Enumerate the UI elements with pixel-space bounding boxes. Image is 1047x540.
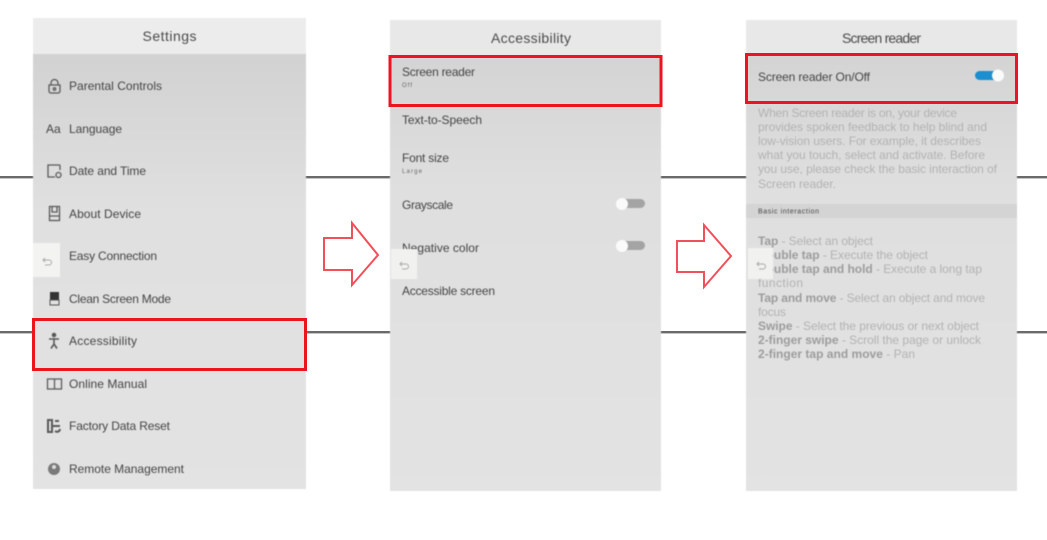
interaction list: 2-finger tap and move - Pan: [758, 347, 915, 361]
back button: [391, 249, 417, 279]
arrow: step 1 to 2: [324, 223, 378, 285]
menu item: Grayscale: Grayscale: [402, 198, 453, 212]
menu item: Clean Screen Mode: Clean Screen Mode: [69, 292, 171, 306]
interaction list: Double tap - Execute the object: [758, 248, 929, 262]
menu item: Negative color: Negative color: [402, 241, 479, 255]
menu item: Text-to-Speech: Text-to-Speech: [402, 113, 482, 127]
menu item: Accessibility: Accessibility: [69, 334, 137, 348]
icon: remote management: [48, 463, 60, 475]
highlight box: Screen reader On/Off: [746, 54, 1016, 102]
description paragraph: provides spoken feedback to help blind and: [758, 120, 987, 134]
heading: Settings: Settings: [142, 28, 196, 44]
icon: accessibility person: [49, 334, 59, 348]
menu item: Parental Controls: Parental Controls: [69, 79, 162, 93]
interaction list: Tap and move - Select an object and move: [758, 291, 985, 305]
back button: [748, 248, 773, 279]
panel background: Settings: [33, 54, 306, 489]
menu item: Date and Time: Date and Time: [69, 164, 146, 178]
icon: parental controls lock: [49, 80, 60, 93]
icon: online manual: [48, 379, 62, 389]
header bar: Accessibility: [390, 20, 661, 56]
menu item: Font size: [402, 151, 449, 175]
menu item: Easy Connection: Easy Connection: [69, 249, 157, 263]
header bar: Screen reader: [746, 20, 1017, 55]
menu item: Screen reader: Off: [402, 83, 412, 89]
description paragraph: what you touch, select and activate. Before: [757, 148, 985, 162]
menu item: Screen reader: [402, 65, 475, 89]
icon: factory data reset: [48, 420, 60, 432]
interaction list: Tap - Select an object: [758, 234, 874, 248]
arrow: step 2 to 3: [677, 225, 731, 287]
description paragraph: When Screen reader is on, your device: [758, 106, 957, 120]
back button: [33, 243, 60, 277]
menu item: About Device: About Device: [69, 207, 141, 221]
menu item: Font size: Font size: [402, 151, 449, 165]
menu item: Accessible screen: Accessible screen: [402, 284, 495, 298]
menu item: Factory Data Reset: Factory Data Reset: [69, 419, 171, 433]
description paragraph: low-vision users. For example, it describes: [758, 134, 981, 148]
panel background: Screen reader: [746, 55, 1017, 491]
icon: date and time: [48, 165, 61, 178]
toggle: Negative color off: [616, 240, 645, 252]
icon: language: Aa: [46, 122, 61, 136]
section bar: Basic interaction: Basic interaction: [758, 208, 819, 216]
toggle: Screen reader on: [975, 70, 1004, 82]
description paragraph: Screen reader.: [758, 177, 836, 191]
toggle: Grayscale off: [616, 198, 645, 210]
setting label: Screen reader On/Off: Screen reader On/Off: [758, 70, 871, 84]
interaction list: Double tap and hold - Execute a long tap: [758, 262, 982, 276]
interaction list: function: [758, 276, 803, 290]
header bar: Settings: [33, 18, 306, 54]
interaction list: focus: [758, 305, 786, 319]
panel: Settings: [33, 18, 306, 489]
section bar: Basic interaction: [746, 204, 1017, 218]
panel: Accessibility: [390, 20, 661, 491]
heading: Accessibility: Accessibility: [491, 30, 571, 46]
interaction list: Swipe - Select the previous or next object: [758, 319, 980, 333]
panel: Screen reader: [746, 20, 1017, 491]
description paragraph: you use, please check the basic interaction of: [758, 162, 998, 176]
icon: about device: [50, 206, 60, 220]
menu item: Language: Language: [69, 122, 122, 136]
interaction list: [758, 234, 985, 361]
interaction list: 2-finger swipe - Scroll the page or unlock: [758, 333, 982, 347]
menu item: Screen reader: Screen reader: [402, 65, 475, 79]
description paragraph: [757, 106, 998, 191]
panel background: Accessibility: [390, 55, 661, 491]
highlight box: Screen reader: [390, 56, 661, 106]
icon: clean screen mode: [50, 292, 59, 305]
background horizontal lines: [0, 176, 1047, 333]
menu item: Online Manual: Online Manual: [69, 377, 147, 391]
menu item: Remote Management: Remote Management: [69, 462, 185, 476]
menu item: Font size: Large: [402, 169, 423, 175]
highlight box: Accessibility: [34, 320, 306, 370]
heading: Screen reader: Screen reader: [842, 30, 921, 46]
